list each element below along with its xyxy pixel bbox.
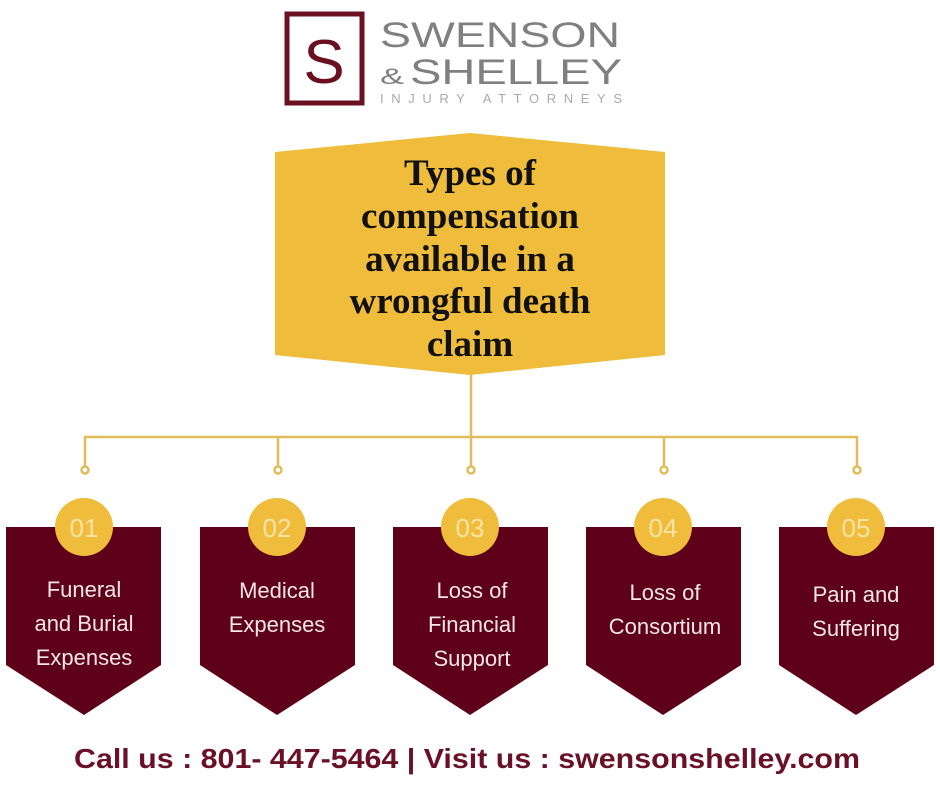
- footer contact: Call us : 801- 447-5464 | Visit us : swensonshelley.com: [74, 743, 860, 774]
- card 4: [586, 498, 741, 715]
- card 2: [200, 498, 355, 715]
- card 4: Consortium: [609, 614, 721, 639]
- logo mark: [287, 14, 362, 103]
- card 2: Medical: [239, 578, 315, 603]
- card 5: [779, 498, 934, 715]
- card 1: Expenses: [36, 645, 132, 670]
- logo wordmark: SHELLEY: [410, 53, 622, 92]
- title banner: wrongful death: [350, 281, 591, 322]
- card 4: Loss of: [630, 580, 701, 605]
- logo: [287, 14, 622, 106]
- card 3: Support: [433, 646, 511, 671]
- card 3: Loss of: [437, 578, 508, 603]
- card 3: Financial: [428, 612, 516, 637]
- card 2: 02: [263, 513, 291, 543]
- card 5: 05: [842, 513, 870, 543]
- title banner: compensation: [361, 196, 579, 237]
- card 3: 03: [456, 513, 484, 543]
- card 1: Funeral: [47, 577, 121, 602]
- logo wordmark: [380, 16, 622, 106]
- title banner: claim: [427, 324, 513, 365]
- card 5: Suffering: [812, 616, 900, 641]
- card 1: [6, 498, 161, 715]
- title banner: available in a: [365, 239, 575, 280]
- card 3: [393, 498, 548, 715]
- card 1: 01: [70, 513, 98, 543]
- card 2: Expenses: [229, 612, 325, 637]
- logo wordmark: INJURY ATTORNEYS: [380, 91, 622, 106]
- logo wordmark: SWENSON: [380, 16, 620, 55]
- title banner: [275, 133, 665, 375]
- title banner: Types of: [404, 153, 537, 194]
- card 1: and Burial: [34, 611, 134, 636]
- card 4: 04: [649, 513, 677, 543]
- logo wordmark: &: [380, 64, 405, 89]
- connector lines: [82, 370, 860, 474]
- card 5: Pain and: [813, 582, 899, 607]
- logo mark: S: [303, 28, 345, 97]
